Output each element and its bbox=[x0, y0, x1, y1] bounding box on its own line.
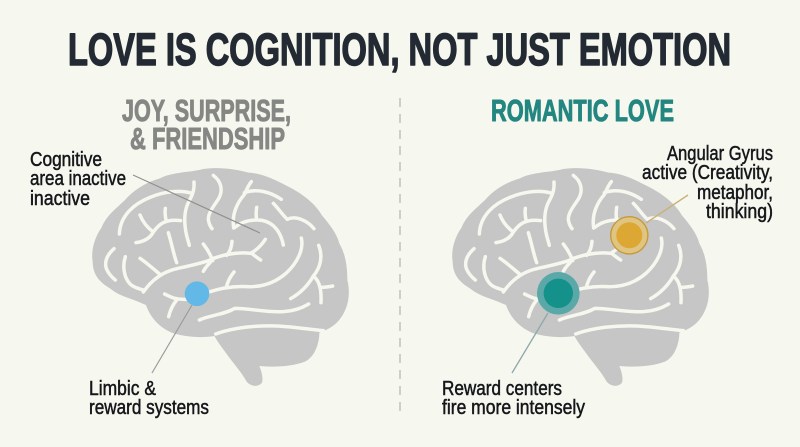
panel: joy, surprise and friendship bbox=[30, 93, 349, 419]
brain illustration: left bbox=[92, 168, 349, 386]
heading: romantic love: ROMANTIC LOVE bbox=[491, 93, 674, 128]
label: cognitive area inactive: inactive bbox=[30, 188, 90, 210]
label: reward centers: Reward centers bbox=[442, 378, 562, 400]
label: angular gyrus: active (Creativity, bbox=[642, 162, 773, 184]
heading: joy, surprise and friendship bbox=[122, 93, 291, 156]
label: angular gyrus: metaphor, bbox=[697, 182, 773, 204]
label: limbic and reward systems: Limbic & bbox=[89, 378, 157, 400]
heading: joy, surprise and friendship: & FRIENDSHIP bbox=[130, 121, 285, 156]
label: angular gyrus: thinking) bbox=[706, 201, 773, 223]
label: angular gyrus: Angular Gyrus bbox=[667, 143, 773, 165]
label: reward centers: fire more intensely bbox=[442, 397, 585, 419]
marker: limbic blue dot bbox=[185, 281, 209, 306]
label: cognitive area inactive: Cognitive bbox=[30, 149, 102, 171]
label: cognitive area inactive bbox=[30, 149, 126, 210]
label: angular gyrus bbox=[642, 143, 773, 223]
leader line: angular gyrus bbox=[646, 195, 688, 223]
brain illustration: right bbox=[452, 168, 709, 386]
leader line: cognitive area bbox=[133, 175, 260, 233]
marker: reward centers teal bbox=[537, 272, 580, 315]
heading: joy, surprise and friendship: JOY, SURPRISE, bbox=[122, 93, 291, 128]
marker: angular gyrus gold bbox=[611, 217, 648, 254]
leader line: reward centers bbox=[512, 313, 548, 373]
label: limbic and reward systems: reward systems bbox=[89, 397, 209, 419]
panel: romantic love bbox=[442, 93, 773, 419]
label: limbic and reward systems bbox=[89, 378, 209, 419]
label: reward centers bbox=[442, 378, 585, 419]
leader line: limbic bbox=[152, 305, 192, 373]
label: cognitive area inactive: area inactive bbox=[30, 168, 126, 190]
